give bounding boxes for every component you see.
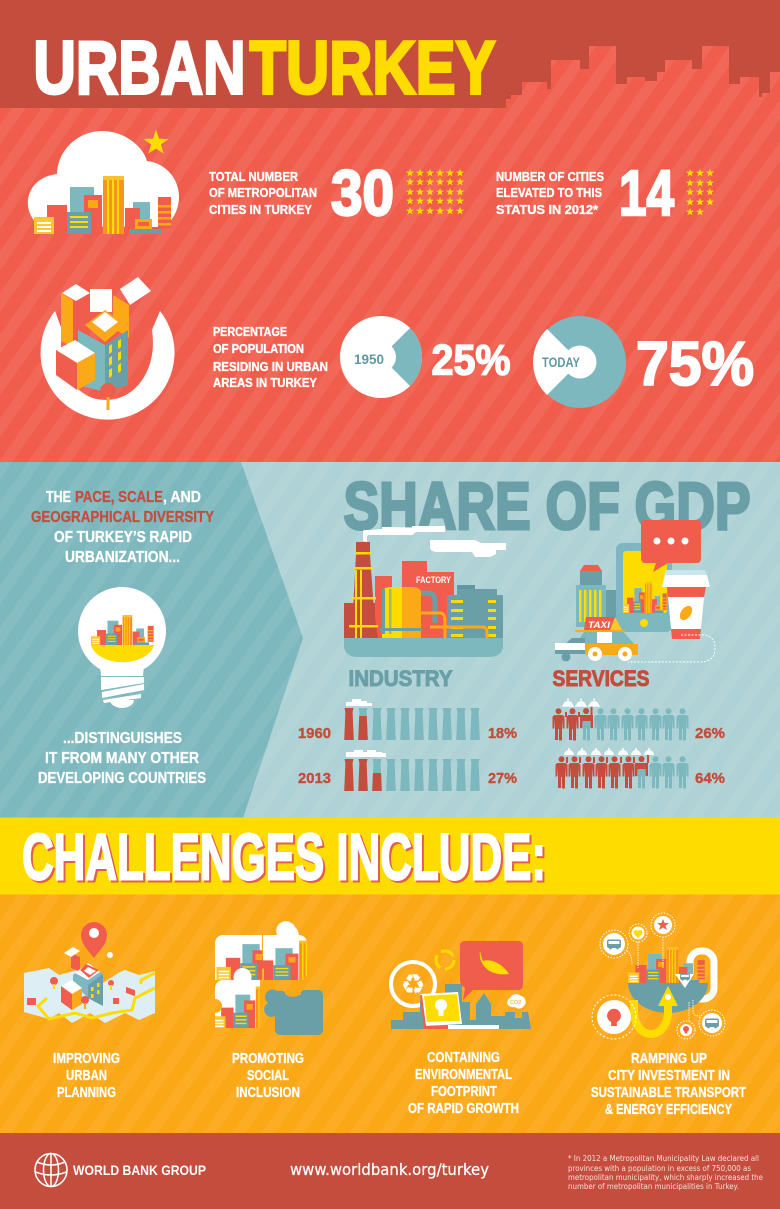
text: number of cities elevated — [496, 170, 604, 217]
text: pace, scale and diversity: PACE, SCALE — [75, 489, 163, 506]
panel: share of GDP background — [0, 462, 780, 818]
text: pace, scale and diversity: , AND — [163, 489, 201, 506]
label: improving urban planning: IMPROVING — [53, 1051, 120, 1067]
pie: 1950 25% — [340, 316, 422, 398]
label: containing environmental footprint: ENVIRONMENTAL — [415, 1067, 512, 1083]
text: pace, scale and diversity: GEOGRAPHICAL DIVERSITY — [31, 509, 214, 526]
label: containing environmental footprint: FOOTPRINT — [431, 1084, 497, 1100]
icon: environmental footprint: ♻ — [400, 968, 426, 1001]
pie: today 75%: TODAY — [542, 354, 581, 370]
pie: today 75% — [533, 316, 626, 408]
icon: environmental footprint — [391, 941, 531, 1029]
text: percentage of population: AREAS IN TURKEY — [213, 376, 318, 390]
label: containing environmental footprint: CONTAINING — [427, 1050, 500, 1066]
icon: social inclusion puzzle — [215, 921, 323, 1035]
title: URBAN — [34, 26, 246, 110]
value 25%: 25% — [432, 336, 510, 384]
heading: challenges include — [22, 820, 548, 896]
text: percentage of population: PERCENTAGE — [213, 325, 287, 339]
text: distinguishes: DEVELOPING COUNTRIES — [38, 770, 206, 787]
icon: factory — [344, 526, 506, 657]
text: pace, scale and diversity: URBANIZATION... — [65, 549, 180, 566]
text: distinguishes — [38, 730, 206, 787]
number 30: 30 — [331, 157, 394, 229]
icon: isometric city in U-shaped ring — [40, 277, 174, 420]
header band with skyline — [0, 0, 780, 108]
label: promoting social inclusion — [232, 1051, 304, 1101]
footnote: number of metropolitan municipalities in Turkey. — [568, 1182, 739, 1191]
text: distinguishes: ...DISTINGUISHES — [63, 730, 182, 747]
text: number of cities elevated: NUMBER OF CITIES — [496, 170, 604, 184]
text: percentage of population: OF POPULATION — [213, 342, 304, 356]
panel: teal arrow — [0, 462, 303, 818]
text: pace, scale and diversity: THE — [46, 489, 71, 506]
text: distinguishes: IT FROM MANY OTHER — [45, 750, 199, 767]
chart: industry 1960 18% — [298, 699, 517, 742]
panel: yellow band — [0, 818, 780, 894]
icon: cloud with city — [28, 130, 179, 234]
footnote — [568, 1154, 763, 1191]
chart: services 1960 26%: 26% — [695, 726, 725, 742]
label: containing environmental footprint: OF RAPID GROWTH — [408, 1101, 519, 1117]
chart: industry 2013 27% — [298, 750, 517, 791]
logo text: WORLD BANK GROUP — [73, 1162, 206, 1178]
stars: 30 cities — [406, 169, 464, 214]
label: promoting social inclusion: INCLUSION — [236, 1085, 300, 1101]
label: ramping up city investment: & ENERGY EFFICIENCY — [605, 1102, 732, 1118]
text: number of cities elevated: STATUS IN 2012* — [496, 203, 598, 217]
label: containing environmental footprint — [408, 1050, 519, 1117]
text: total number of metropolitan cities: CITIES IN TURKEY — [209, 203, 313, 217]
value 75%: 75% — [636, 330, 754, 399]
chart: services 1960 26% — [552, 698, 725, 742]
number 14: 14 — [619, 157, 674, 229]
chart: services 2013 64% — [556, 748, 725, 788]
chart: industry 2013 27%: 27% — [488, 771, 517, 787]
icon: factory: FACTORY — [416, 575, 451, 585]
footnote: * In 2012 a Metropolitan Municipality Law declared all — [568, 1154, 759, 1163]
text: total number of metropolitan cities: OF METROPOLITAN — [209, 186, 317, 200]
icon: services city, phone, taxi and coffee: TAXI — [588, 620, 611, 630]
icon: urban planning map — [24, 922, 155, 1023]
icon: city investment — [592, 913, 725, 1039]
text: number of cities elevated: ELEVATED TO THIS — [496, 186, 602, 200]
stars: 14 cities — [686, 169, 714, 215]
text: total number of metropolitan cities — [209, 170, 317, 217]
chart: industry 1960 18%: 18% — [488, 726, 517, 742]
panel: footer — [0, 1133, 780, 1209]
footnote: provinces with a population in excess of 750,000 as — [568, 1164, 751, 1173]
text: percentage of population — [213, 325, 328, 390]
label: improving urban planning: PLANNING — [57, 1085, 116, 1101]
website url: www.worldbank.org/turkey — [290, 1160, 489, 1179]
title: TURKEY — [250, 26, 496, 110]
text: pace, scale and diversity: OF TURKEY’S RAPID — [54, 529, 192, 546]
heading: services: SERVICES — [552, 666, 650, 691]
title — [34, 26, 496, 110]
label: ramping up city investment — [591, 1051, 746, 1118]
label: improving urban planning — [53, 1051, 120, 1101]
text: percentage of population: RESIDING IN URBAN — [213, 360, 328, 374]
coral background panel — [0, 0, 780, 462]
icon: light bulb with city — [78, 587, 166, 708]
chart: industry 2013 27%: 2013 — [298, 771, 331, 787]
label: promoting social inclusion: PROMOTING — [232, 1051, 304, 1067]
logo: World Bank globe — [35, 1154, 67, 1186]
label: promoting social inclusion: SOCIAL — [247, 1068, 289, 1084]
chart: services 2013 64%: 64% — [695, 771, 725, 787]
icon: services city, phone, taxi and coffee — [555, 520, 715, 662]
label: improving urban planning: URBAN — [66, 1068, 107, 1084]
heading: industry: INDUSTRY — [348, 666, 452, 691]
panel: orange challenges — [0, 894, 780, 1134]
text: pace, scale and diversity — [31, 489, 214, 566]
pie: 1950 25%: 1950 — [354, 351, 384, 367]
label: ramping up city investment: CITY INVESTMENT IN — [608, 1068, 730, 1084]
footnote: metropolitan municipality, which sharply increased the — [568, 1173, 763, 1182]
label: ramping up city investment: RAMPING UP — [631, 1051, 707, 1067]
text: total number of metropolitan cities: TOTAL NUMBER — [209, 170, 298, 184]
icon: environmental footprint: CO2 — [510, 1000, 521, 1006]
chart: industry 1960 18%: 1960 — [298, 726, 331, 742]
